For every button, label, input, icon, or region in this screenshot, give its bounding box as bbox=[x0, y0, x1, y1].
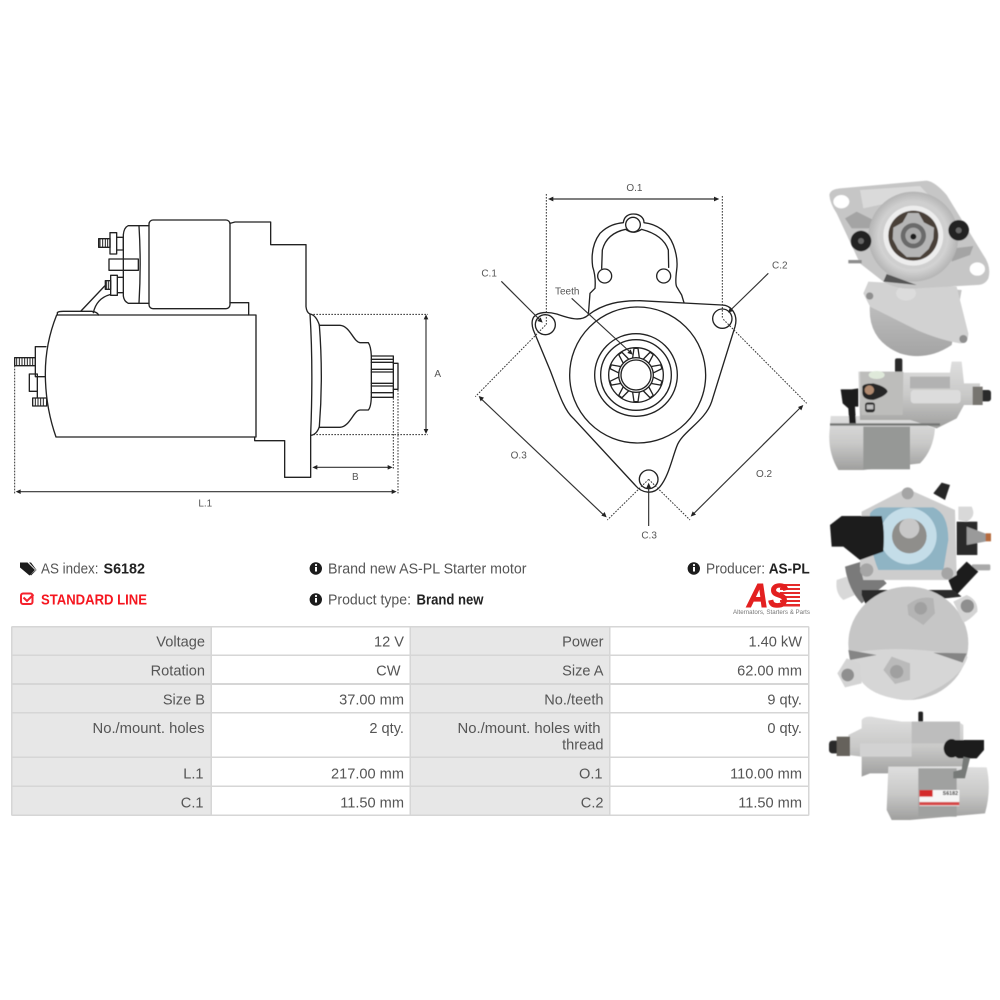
row: C.1 and C.2 bbox=[181, 796, 802, 812]
photo: front view of starter bbox=[829, 181, 989, 356]
dimension O.2: O.2 bbox=[756, 469, 773, 480]
label Teeth bbox=[555, 286, 633, 355]
row: L.1 and O.1: O.1 bbox=[579, 766, 602, 782]
row: size B and teeth: No./teeth bbox=[544, 692, 604, 708]
solenoid bbox=[57, 220, 230, 315]
label C.2: C.2 bbox=[772, 260, 788, 271]
dimension O.3: O.3 bbox=[511, 451, 527, 462]
label C.1 bbox=[481, 269, 543, 323]
row: rotation and size A: CW bbox=[376, 664, 401, 680]
info row: AS index: S6182 bbox=[104, 562, 145, 578]
photo: rear view of starter bbox=[830, 483, 991, 700]
row: L.1 and O.1: 217.00 mm bbox=[331, 766, 404, 782]
row: voltage and power: 1.40 kW bbox=[748, 634, 802, 650]
row: C.1 and C.2: 11.50 mm bbox=[738, 796, 802, 812]
row: size B and teeth: 37.00 mm bbox=[339, 692, 404, 708]
info: producer: AS-PL bbox=[769, 562, 810, 578]
row: C.1 and C.2: 11.50 mm bbox=[340, 796, 404, 812]
dimension O.3 bbox=[475, 325, 649, 520]
photo: side view of starter bbox=[829, 358, 991, 470]
icon: info bbox=[688, 562, 700, 575]
row: C.1 and C.2: C.2 bbox=[581, 796, 604, 812]
row: mounting holes: thread bbox=[562, 738, 604, 754]
row: mounting holes: 0 qty. bbox=[767, 721, 802, 737]
flange bbox=[532, 301, 736, 492]
logo: AS-PL: AS bbox=[746, 577, 788, 614]
row: mounting holes: 2 qty. bbox=[369, 721, 404, 737]
info: product type: Brand new bbox=[416, 592, 484, 608]
dimension O.2 bbox=[649, 319, 807, 520]
icon: red checkbox bbox=[21, 594, 34, 604]
row: size B and teeth: Size B bbox=[163, 692, 205, 708]
row: voltage and power: Voltage bbox=[156, 634, 205, 650]
side view technical drawing bbox=[15, 220, 441, 509]
dimension L.1 bbox=[15, 366, 398, 509]
dimension O.1 bbox=[546, 183, 722, 325]
photo: opposite side view of starter: S6182 bbox=[943, 791, 958, 797]
info: product type: Product type: bbox=[328, 592, 411, 608]
row: rotation and size A: 62.00 mm bbox=[737, 664, 802, 680]
info: product type bbox=[310, 592, 484, 608]
gear teeth bbox=[610, 348, 662, 402]
motor body bbox=[45, 315, 256, 437]
row: L.1 and O.1: 110.00 mm bbox=[730, 766, 802, 782]
row: L.1 and O.1: L.1 bbox=[183, 766, 204, 782]
mounting holes bbox=[535, 309, 732, 489]
label C.3 bbox=[641, 483, 657, 541]
pinion bbox=[371, 356, 398, 397]
dimension A bbox=[313, 314, 441, 435]
info row: AS index: AS index: bbox=[41, 562, 98, 578]
photo: opposite side view of starter bbox=[829, 712, 989, 820]
row: size B and teeth bbox=[163, 692, 802, 708]
logo: AS-PL: Alternators, Starters & Parts bbox=[733, 609, 810, 616]
front view technical drawing bbox=[475, 183, 807, 541]
info row: AS index bbox=[20, 562, 145, 578]
icon: info bbox=[310, 562, 322, 575]
row: mounting holes: No./mount. holes bbox=[92, 721, 204, 737]
row: rotation and size A: Size A bbox=[562, 664, 604, 680]
dimension B: B bbox=[352, 472, 359, 483]
starter housing outline bbox=[230, 222, 371, 477]
pinion concentric circles bbox=[570, 307, 706, 443]
row: voltage and power: 12 V bbox=[374, 634, 404, 650]
row: voltage and power: Power bbox=[562, 634, 604, 650]
table background bbox=[11, 626, 810, 816]
label Teeth: Teeth bbox=[555, 286, 579, 297]
dimension A: A bbox=[434, 369, 441, 380]
dimension B bbox=[312, 398, 393, 483]
dimension L.1: L.1 bbox=[198, 498, 213, 509]
label C.1: C.1 bbox=[481, 269, 497, 280]
row: mounting holes bbox=[92, 721, 802, 754]
specification table bbox=[11, 626, 810, 816]
logo: AS-PL bbox=[733, 577, 810, 616]
solenoid back outline bbox=[588, 214, 684, 315]
row: rotation and size A: Rotation bbox=[151, 664, 205, 680]
icon: tags bbox=[20, 562, 36, 576]
label C.2 bbox=[728, 260, 788, 313]
rear terminals bbox=[15, 347, 47, 406]
info: brand new starter motor: Brand new AS-PL Starter motor bbox=[328, 562, 527, 578]
info: producer: Producer: bbox=[706, 562, 765, 578]
dimension O.1: O.1 bbox=[626, 183, 643, 194]
row: L.1 and O.1 bbox=[183, 766, 802, 782]
row: C.1 and C.2: C.1 bbox=[181, 796, 204, 812]
label C.3: C.3 bbox=[641, 530, 657, 541]
row: mounting holes: No./mount. holes with bbox=[458, 721, 600, 737]
info row: standard line: STANDARD LINE bbox=[41, 592, 147, 608]
row: size B and teeth: 9 qty. bbox=[767, 692, 802, 708]
icon: info bbox=[310, 593, 322, 606]
row: voltage and power bbox=[156, 634, 802, 650]
row: rotation and size A bbox=[151, 664, 802, 680]
info: producer bbox=[688, 562, 810, 578]
